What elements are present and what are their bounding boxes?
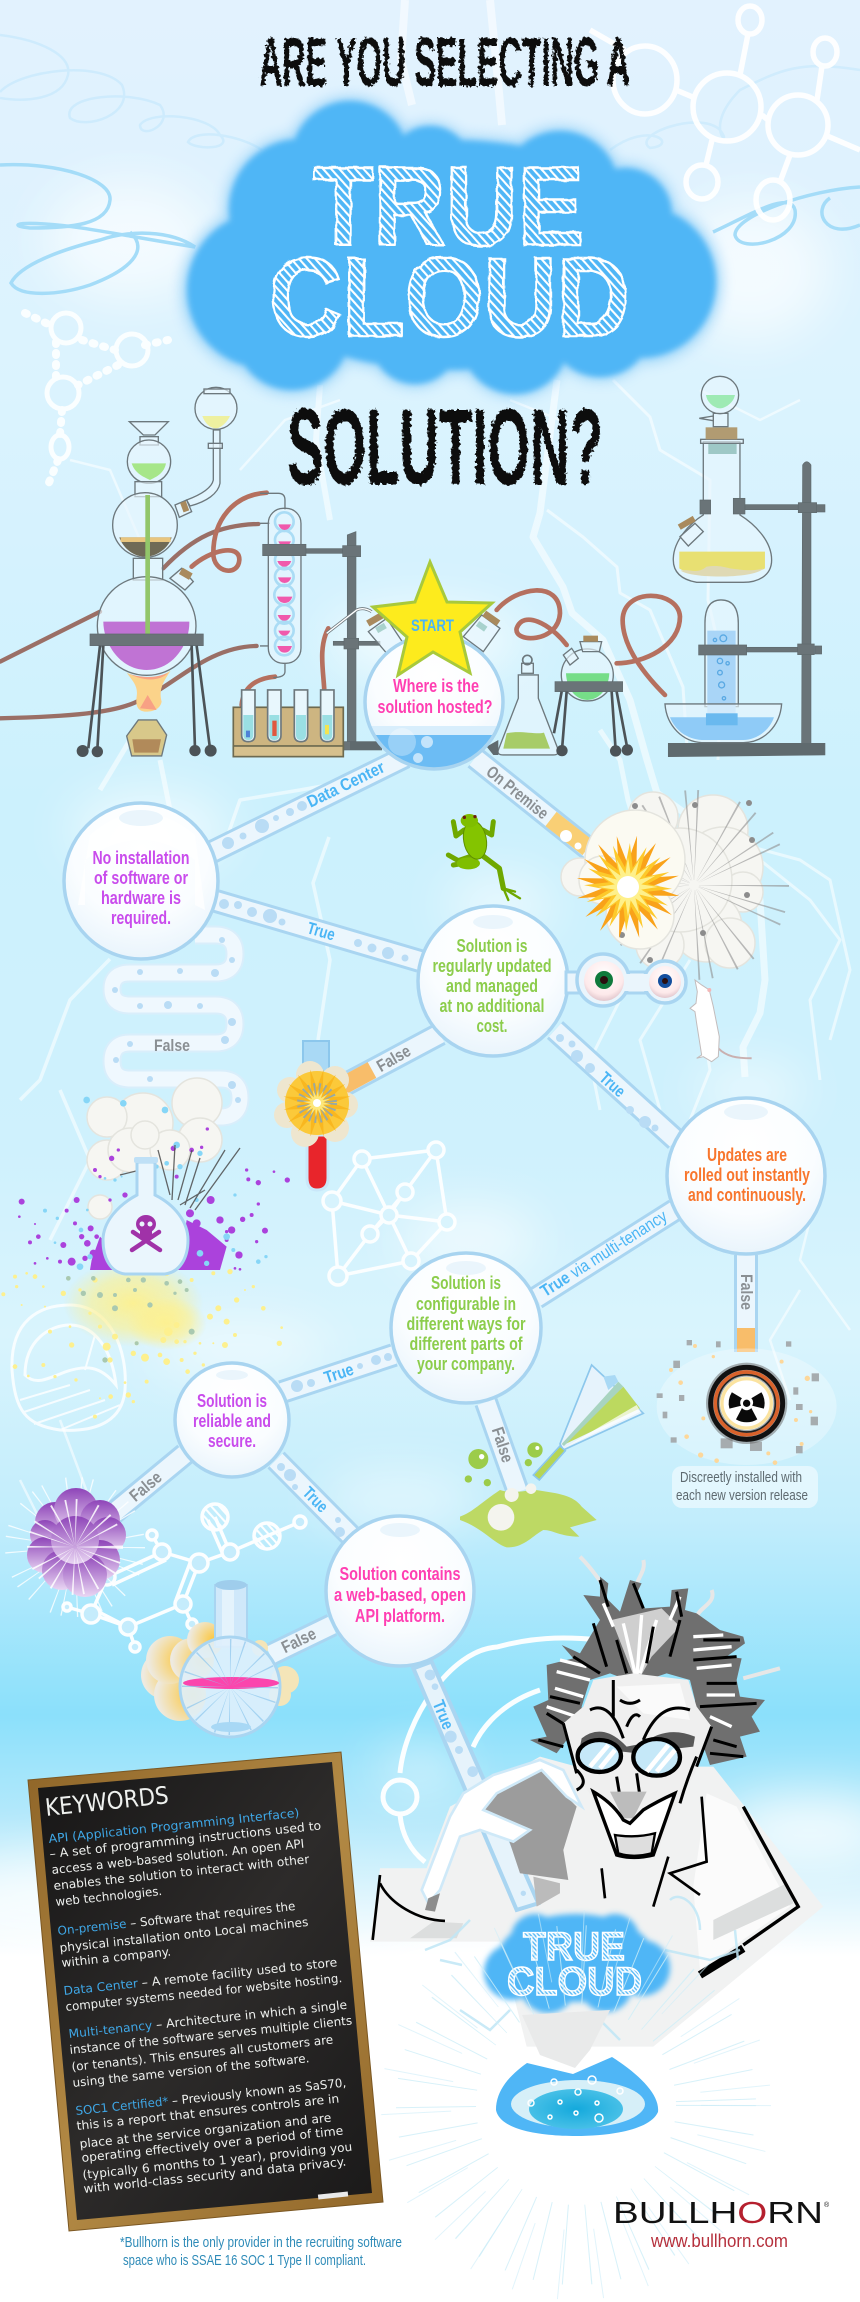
bubble: configurable: your company.	[417, 1354, 515, 1374]
explosion: on premise	[561, 792, 763, 969]
icon: frog	[448, 814, 520, 900]
tube: reliable to purple burst	[110, 1454, 185, 1516]
tube: reliable to api	[276, 1460, 350, 1537]
icon: green eye	[584, 961, 624, 1001]
hand	[422, 1760, 582, 1903]
tube: configurable to spill: False	[488, 1425, 517, 1465]
molecule: left beaded chain	[25, 313, 168, 485]
serpentine false tube: False	[154, 1036, 190, 1055]
test tube in hand	[413, 1662, 538, 1910]
molecule: centre cube	[323, 1142, 455, 1285]
face	[563, 1673, 712, 1858]
definition: on-premise: within a company.	[61, 1945, 172, 1970]
bubble: configurable: different ways for	[406, 1314, 526, 1334]
definition: multi-tenancy: (or tenants). This ensures all customers are	[71, 2033, 334, 2074]
definition: api: API (Application Programming Interface)	[48, 1806, 300, 1846]
definition: soc1 certified: this is a report that ensures controls are in	[76, 2091, 340, 2133]
definition: soc1 certified: operating effectively over a period of time	[81, 2124, 344, 2165]
bubble: no installation: hardware is	[101, 888, 181, 908]
tube: updated to test tube explosion	[335, 1034, 440, 1090]
rubber hoses	[0, 493, 328, 718]
definition: multi-tenancy: Multi-tenancy – Architecture in which a single	[68, 1998, 348, 2041]
tube: reliable to configurable	[282, 1353, 394, 1392]
icon: skull and crossbones	[132, 1215, 160, 1250]
start question: solution hosted?	[378, 697, 492, 717]
round glasses	[578, 1739, 680, 1776]
caption: discreetly installed: Discreetly installed with	[680, 1469, 802, 1486]
lab coat cuff below cloud	[522, 2010, 610, 2068]
background curly tubing lines	[0, 35, 860, 293]
definition: api	[48, 1806, 322, 1909]
tube: no installation to updated: True	[305, 918, 337, 945]
wild hair	[530, 1557, 780, 1765]
small true cloud badge: CLOUD	[507, 1960, 642, 2004]
tube: reliable to purple burst: False	[126, 1468, 166, 1505]
bubble: reliable: Solution is	[197, 1391, 267, 1411]
bubble: configurable	[391, 1253, 541, 1403]
definition: api: access a web-based solution. An open API	[51, 1837, 305, 1877]
stand foot beside start flask	[350, 740, 498, 755]
tube: updates to radiation: False	[737, 1274, 756, 1310]
definition: multi-tenancy: instance of the software serves multiple clients	[69, 2013, 353, 2057]
tube: data center: Data Center	[304, 757, 388, 812]
definition: on-premise	[57, 1899, 309, 1970]
tube: updated to updates: True	[596, 1068, 629, 1101]
definition: soc1 certified: SOC1 Certified* – Previously known as SaS70,	[75, 2076, 347, 2118]
scientist coat	[370, 1662, 823, 2047]
start flask bubble	[360, 562, 510, 773]
poison flask	[103, 1157, 188, 1274]
tube: api to broken flask: False	[278, 1624, 319, 1657]
small true cloud badge: TRUE	[523, 1925, 625, 1969]
eyeballs connector	[566, 954, 686, 1006]
tube: data center	[212, 757, 405, 852]
tube: no installation to updated	[216, 899, 420, 962]
cloud title: true cloud: CLOUD	[269, 235, 630, 360]
bubble: regularly updated: at no additional	[440, 996, 544, 1016]
purple splatter	[18, 1127, 290, 1271]
bubble: regularly updated: and managed	[446, 976, 538, 996]
definition: multi-tenancy	[68, 1998, 353, 2090]
bubble: updates: Updates are	[707, 1145, 787, 1165]
green droplets	[465, 1442, 543, 1486]
bubble: no installation	[64, 803, 218, 959]
definition: on-premise: On-premise – Software that requires the	[57, 1899, 296, 1938]
blue droplets	[43, 1097, 268, 1270]
tube: configurable to spill	[486, 1402, 518, 1492]
footnote: *Bullhorn is the only provider in the recruiting software	[120, 2234, 402, 2251]
definition: api: enables the solution to interact with other	[53, 1852, 310, 1893]
condenser column and stand	[260, 493, 382, 750]
bubble: regularly updated: regularly updated	[432, 956, 552, 976]
bubble: api: API platform.	[355, 1606, 445, 1626]
right lab apparatus	[327, 376, 825, 757]
caption: discreetly installed	[672, 1466, 818, 1508]
small true cloud badge	[484, 1914, 670, 2013]
background lightning streaks	[20, 0, 850, 1560]
rubber hoses	[497, 590, 680, 695]
blackboard	[28, 1752, 383, 2231]
tube: updates to radiation	[737, 1255, 756, 1352]
start question: Where is the	[393, 676, 479, 696]
bubble: regularly updated: cost.	[476, 1016, 508, 1036]
bubble: no installation: No installation	[92, 848, 190, 868]
tube: updated to updates	[555, 1030, 676, 1140]
bubble: updates	[667, 1098, 825, 1254]
bubble: regularly updated: Solution is	[456, 936, 528, 956]
footnote	[120, 2234, 402, 2269]
footnote: space who is SSAE 16 SOC 1 Type II compliant.	[123, 2252, 366, 2269]
tube: reliable to configurable: True	[322, 1360, 356, 1387]
definition: data center: computer systems needed for website hosting.	[65, 1971, 343, 2014]
definition: soc1 certified: place at the service organization and are	[79, 2111, 332, 2151]
icon: blue eye	[649, 966, 681, 998]
bullhorn logo: ®	[824, 2201, 830, 2209]
definition: on-premise: physical installation onto Local machines	[59, 1915, 309, 1955]
bubble: updates: rolled out instantly	[684, 1165, 810, 1185]
icon: white mouse	[690, 980, 752, 1062]
icon: tipped funnel	[533, 1365, 643, 1480]
website url: www.bullhorn.com	[650, 2231, 788, 2251]
yellow splatter	[1, 1260, 283, 1419]
broken flask	[141, 1580, 299, 1737]
large yellow flask and stand	[668, 376, 825, 757]
keywords heading: KEYWORDS	[44, 1781, 170, 1822]
glowing flask pool	[496, 2057, 658, 2136]
bubble: api: a web-based, open	[334, 1585, 466, 1605]
paint splatter	[1, 1097, 290, 1419]
blue bowl and upright tube	[665, 600, 822, 743]
definition: soc1 certified: with world-class security and data privacy.	[83, 2154, 347, 2196]
bubble: no installation: of software or	[94, 868, 188, 888]
start label: START	[411, 616, 454, 635]
bubble: regularly updated	[418, 906, 568, 1056]
test tube in hand: True	[429, 1697, 458, 1732]
definition: soc1 certified: (typically 6 months to 1 year), providing you	[82, 2140, 353, 2182]
bullhorn logo: BULLH ORN	[613, 2195, 823, 2230]
sleeve shading	[477, 1770, 577, 1880]
large blue cloud	[181, 96, 722, 398]
definition: soc1 certified	[75, 2076, 353, 2196]
purple burst	[25, 1488, 126, 1597]
tube: reliable to api: True	[299, 1483, 332, 1516]
serpentine false tube	[112, 935, 241, 1117]
definition: multi-tenancy: using the same version of the software.	[72, 2051, 310, 2090]
bubble: api	[326, 1516, 474, 1666]
left lab apparatus	[0, 387, 382, 757]
cloud title: true cloud	[269, 144, 630, 360]
distillation flasks	[77, 387, 237, 757]
bubble: reliable	[175, 1363, 289, 1477]
grey-green droplets on yellow	[66, 1276, 195, 1363]
tube: on premise: On Premise	[482, 762, 552, 823]
scientist head	[530, 1557, 780, 1858]
molecule: lower left chain	[63, 1504, 306, 1652]
molecule: top right rings	[590, 6, 860, 220]
bubble: api: Solution contains	[340, 1564, 460, 1584]
definition: api: – A set of programming instructions used to	[49, 1819, 322, 1861]
burner flame	[127, 671, 171, 756]
molecule behind scientist	[383, 1638, 600, 1862]
start question	[378, 676, 492, 717]
start star	[373, 562, 492, 675]
cloud title: true cloud: TRUE	[313, 144, 584, 269]
caption: discreetly installed: each new version release	[676, 1487, 808, 1504]
smoke above poison flask	[87, 1078, 222, 1219]
test tube rack	[233, 690, 343, 757]
icon: radiation burst	[657, 1340, 837, 1465]
definition: data center: Data Center – A remote facility used to store	[63, 1955, 338, 1998]
start flask side ports	[327, 609, 500, 653]
energy wisps around cloud	[425, 1897, 740, 2040]
bubble: reliable: reliable and	[193, 1411, 271, 1431]
tube: updated to test tube explosion: False	[373, 1041, 414, 1076]
coat line work	[743, 1807, 798, 1945]
bubble: reliable: secure.	[208, 1431, 256, 1451]
conical flask	[498, 655, 558, 755]
bubble: no installation: required.	[111, 908, 171, 928]
flask needles	[120, 1145, 240, 1210]
tube: on premise	[475, 758, 590, 850]
green spill and funnel	[460, 1365, 643, 1547]
bubble: configurable: Solution is	[431, 1273, 501, 1293]
definition: api: web technologies.	[55, 1884, 163, 1909]
bubble: updates: and continuously.	[688, 1185, 806, 1205]
bubble: configurable: different parts of	[410, 1334, 523, 1354]
tube: true via multi-tenancy: True via multi-tenancy	[537, 1206, 671, 1301]
grin	[593, 1792, 675, 1857]
light rays under flask	[416, 1945, 736, 2265]
icon: test tube explosion	[274, 1041, 358, 1190]
green round flask on tripod	[554, 636, 633, 757]
bubble: configurable: configurable in	[416, 1294, 516, 1314]
sketched pressure gauge	[12, 1305, 125, 1430]
